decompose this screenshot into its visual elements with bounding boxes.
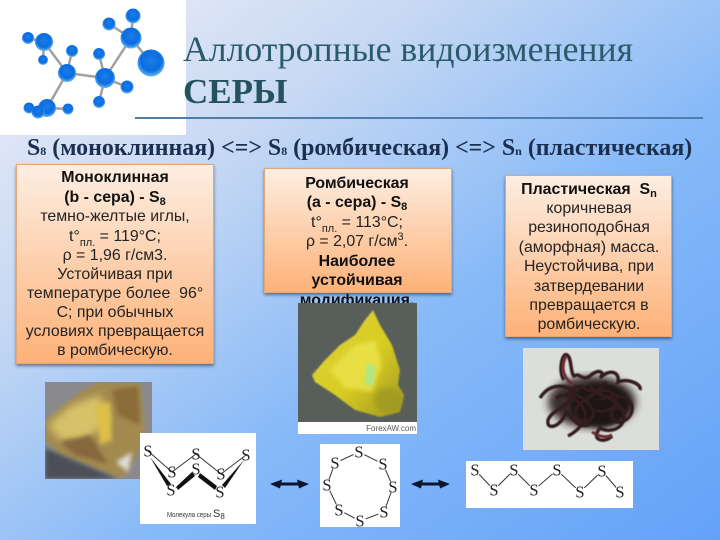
panel: monoclinic sulfur: Моноклинная — [61, 169, 169, 186]
panel: rhombic sulfur: . — [404, 233, 408, 250]
diagram: S8 crown molecule: S — [167, 462, 177, 482]
diagram: S8 ring: S — [330, 454, 340, 472]
panel: plastic sulfur: Неустойчива, при — [524, 258, 654, 275]
title: СЕРЫ — [183, 72, 287, 111]
title divider line — [135, 117, 703, 119]
icon: blue molecule model — [0, 0, 186, 135]
diagram: S8 crown molecule: S — [191, 460, 201, 478]
title — [183, 29, 633, 111]
panel: rhombic sulfur: Наиболее — [319, 253, 396, 270]
diagram: open sulfur chain: S — [552, 460, 562, 480]
arrow: monoclinic to rhombic — [270, 480, 309, 488]
panel: monoclinic sulfur: температуре более 96° — [27, 285, 203, 302]
photo: plastic sulfur tangle — [523, 348, 659, 450]
panel: rhombic sulfur: Ромбическая — [305, 175, 409, 192]
diagram: S8 crown molecule: S — [215, 482, 225, 502]
photo: rhombic sulfur crystal — [298, 303, 417, 434]
panel: monoclinic sulfur: С; при обычных — [57, 304, 173, 321]
diagram: open sulfur chain: S — [597, 462, 607, 480]
panel: plastic sulfur: n — [650, 188, 657, 200]
diagram: open sulfur chain — [466, 460, 633, 508]
panel: plastic sulfur: затвердевании — [534, 278, 644, 295]
diagram: S8 crown molecule: S — [191, 444, 201, 464]
diagram: open sulfur chain: S — [489, 480, 499, 500]
subtitle: allotrope equilibrium: S8 (моноклинная) <=> S8 (ромбическая) <=> Sn (пластическая) — [27, 135, 692, 161]
panel: rhombic sulfur: модификация. — [300, 292, 414, 309]
diagram: S8 ring — [320, 442, 400, 530]
diagram: S8 crown molecule: S — [143, 442, 153, 460]
panel: plastic sulfur: коричневая — [546, 200, 632, 217]
panel: plastic sulfur — [506, 176, 672, 336]
diagram: S8 crown molecule: Молекула серы — [167, 510, 211, 519]
diagram: S8 crown molecule — [140, 433, 256, 524]
diagram: open sulfur chain: S — [575, 482, 585, 502]
panel: monoclinic sulfur: условиях превращается — [26, 323, 204, 340]
diagram: S8 ring: S — [388, 478, 398, 496]
diagram: open sulfur chain: S — [529, 480, 539, 500]
panel: rhombic sulfur: пл. — [322, 223, 337, 235]
diagram: S8 ring: S — [322, 476, 332, 494]
panel: monoclinic sulfur: ρ = 1,96 г/см3. — [63, 247, 167, 264]
diagram: open sulfur chain: S — [509, 460, 519, 480]
diagram: open sulfur chain: S — [615, 482, 625, 502]
diagram: S8 ring: S — [334, 500, 344, 520]
panel: rhombic sulfur: t° — [311, 214, 322, 231]
panel: monoclinic sulfur: 8 — [160, 196, 166, 208]
diagram: S8 ring: S — [379, 502, 389, 522]
panel: monoclinic sulfur: пл. — [80, 237, 95, 249]
diagram: open sulfur chain: S — [470, 460, 480, 480]
diagram: S8 ring: S — [354, 442, 364, 462]
diagram: S8 ring: S — [378, 454, 388, 474]
panel: plastic sulfur: резиноподобная — [528, 219, 650, 236]
panel: monoclinic sulfur — [16, 164, 214, 364]
panel: rhombic sulfur: 8 — [401, 201, 407, 213]
panel: monoclinic sulfur: Устойчивая при — [57, 266, 173, 283]
diagram: S8 crown molecule: S — [241, 446, 251, 464]
diagram: S8 crown molecule: 8 — [220, 512, 225, 521]
diagram: S8 crown molecule: S — [213, 508, 220, 520]
title: Аллотропные видоизменения — [183, 29, 633, 69]
panel: rhombic sulfur — [264, 168, 452, 309]
panel: monoclinic sulfur: темно-желтые иглы, — [40, 208, 190, 225]
panel: plastic sulfur: Пластическая S — [521, 181, 650, 198]
panel: plastic sulfur: ромбическую. — [538, 316, 640, 333]
panel: monoclinic sulfur: (b - сера) - S — [64, 189, 160, 206]
panel: monoclinic sulfur: t° — [69, 228, 80, 245]
panel: rhombic sulfur: 3 — [398, 231, 404, 243]
panel: rhombic sulfur: (а - сера) - S — [307, 194, 401, 211]
photo: rhombic sulfur crystal: ForexAW.com — [366, 424, 416, 433]
panel: rhombic sulfur: ρ = 2,07 г/см — [306, 233, 398, 250]
diagram: S8 crown molecule: S — [166, 480, 176, 500]
diagram: S8 crown molecule: S — [216, 464, 226, 484]
panel: plastic sulfur: превращается в — [529, 297, 649, 314]
photo: monoclinic sulfur crystals — [45, 382, 152, 479]
panel: rhombic sulfur: устойчивая — [312, 272, 402, 289]
arrow: rhombic to plastic — [411, 480, 450, 488]
panel: monoclinic sulfur: = 119°C; — [95, 228, 161, 245]
panel: rhombic sulfur: = 113°C; — [337, 214, 403, 231]
panel: plastic sulfur: (аморфная) масса. — [519, 239, 659, 256]
panel: monoclinic sulfur: в ромбическую. — [57, 342, 173, 359]
diagram: S8 ring: S — [355, 512, 365, 530]
